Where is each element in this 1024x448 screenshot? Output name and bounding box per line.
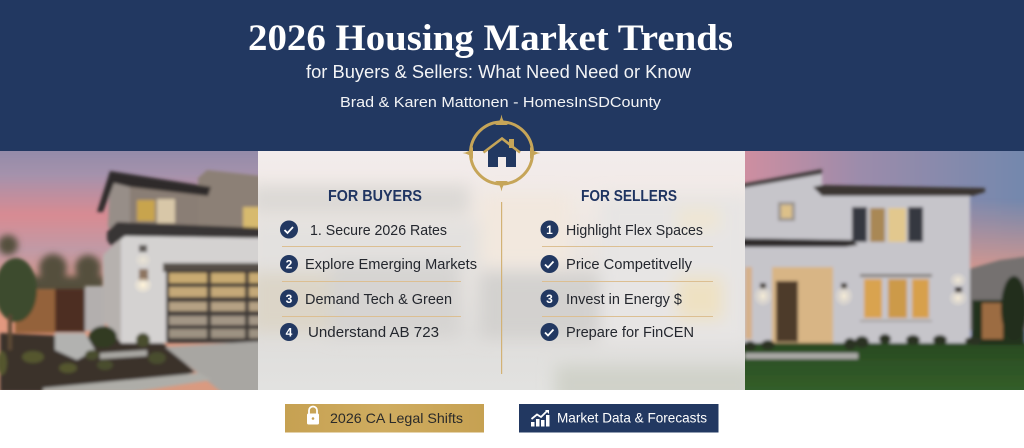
button: market data xyxy=(519,404,718,432)
left driveway and paths xyxy=(164,339,258,390)
item: secure rates: 1. Secure 2026 Rates xyxy=(310,222,447,239)
panel: for buyers xyxy=(280,188,477,341)
left house lower xyxy=(103,238,121,343)
item: tech and green: 3 xyxy=(286,292,293,306)
item: emerging markets: Explore Emerging Markets xyxy=(305,256,477,273)
item: AB 723: 4 xyxy=(286,326,293,340)
icon: lock xyxy=(307,406,319,424)
right lawn xyxy=(745,340,1024,390)
right shrubs xyxy=(744,334,981,351)
author line: Brad & Karen Mattonen - HomesInSDCounty xyxy=(340,94,662,111)
icon: compass house emblem xyxy=(462,114,540,192)
button: legal shifts: 2026 CA Legal Shifts xyxy=(330,410,463,426)
right house walls xyxy=(720,174,970,343)
item: invest in energy: 3 xyxy=(546,292,553,306)
icon: rising bar chart xyxy=(531,410,550,426)
heading: for sellers: FOR SELLERS xyxy=(581,188,677,205)
item: AB 723: Understand AB 723 xyxy=(308,324,439,341)
item: emerging markets: 2 xyxy=(286,258,293,272)
heading: for buyers: FOR BUYERS xyxy=(328,188,422,205)
left shrubs xyxy=(0,326,166,375)
left background trees xyxy=(0,235,105,296)
button: legal shifts xyxy=(285,404,484,432)
item: flex spaces: 1 xyxy=(546,223,553,237)
left house upper xyxy=(128,186,200,226)
background photo: houses at dusk xyxy=(0,145,1024,395)
panel divider xyxy=(501,202,502,374)
item: price competitively: Price Competitvelly xyxy=(566,256,692,273)
item: invest in energy: Invest in Energy $ xyxy=(566,291,683,308)
subtitle: for Buyers & Sellers: What Need Need or Know xyxy=(306,62,692,82)
title: 2026 Housing Market Trends xyxy=(248,18,733,59)
item: FinCEN: Prepare for FinCEN xyxy=(566,324,694,341)
button: market data: Market Data & Forecasts xyxy=(557,410,707,426)
left ground xyxy=(0,333,195,392)
item: tech and green: Demand Tech & Green xyxy=(305,291,452,308)
item: flex spaces: Highlight Flex Spaces xyxy=(566,222,703,239)
header band xyxy=(0,0,1024,151)
panel: for sellers xyxy=(540,188,713,341)
right distant hill and trees xyxy=(965,256,1024,330)
frosted content panel xyxy=(250,151,755,405)
